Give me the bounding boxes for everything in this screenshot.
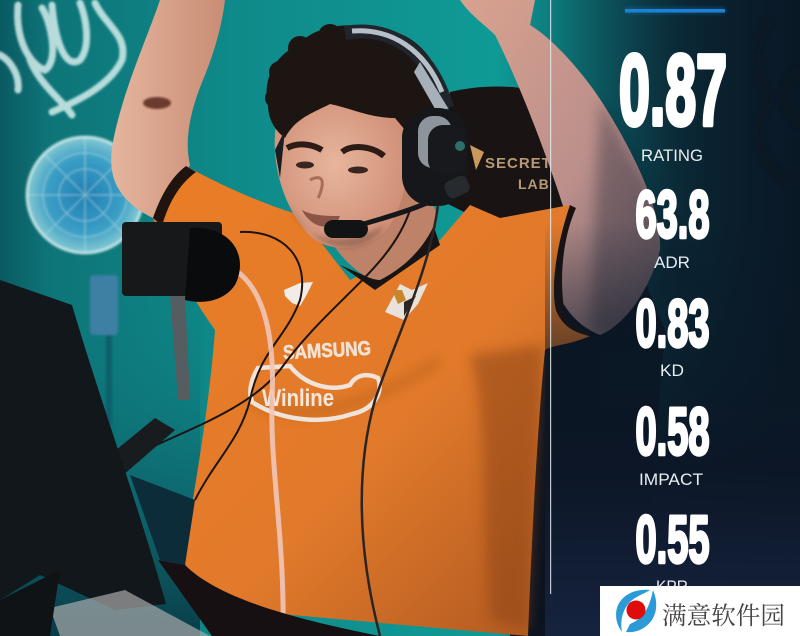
- thin black cables: [100, 210, 410, 500]
- desk: [0, 560, 380, 636]
- blue bottom-left shelf: [130, 475, 195, 565]
- stat: ADR label: ADR: [654, 253, 690, 272]
- white camera cable: [235, 270, 283, 636]
- face: [275, 96, 408, 248]
- faint logo in right panel: [757, 20, 800, 180]
- microphone boom: [324, 174, 472, 238]
- monitor stand: [0, 295, 190, 565]
- stat: KPR label: KPR: [656, 577, 688, 596]
- stat: rating label: RATING: [641, 146, 703, 165]
- left monitor: [0, 280, 166, 610]
- gaming chair: [440, 86, 566, 230]
- lower right dark gradient: [545, 220, 800, 636]
- jersey brand mark: [284, 282, 313, 306]
- facial features: [287, 144, 385, 248]
- stat: ADR value: 63.8: [636, 178, 710, 252]
- graffiti wall art: [0, 3, 123, 115]
- curly hair: [265, 24, 440, 138]
- raised arm: viewer right: [460, 0, 660, 335]
- shaded forearm overlay: [590, 100, 700, 340]
- headset cable: [362, 205, 438, 636]
- stat: KPR value: 0.55: [636, 502, 710, 578]
- gaming chair: LAB: [518, 176, 550, 192]
- watermark logo icon: [616, 590, 656, 632]
- stat: impact value: 0.58: [636, 394, 710, 470]
- neck: [318, 180, 438, 280]
- right panel side gradient: [550, 0, 800, 636]
- stat: KD value: 0.83: [636, 286, 710, 362]
- vertical divider line: [550, 0, 551, 594]
- stat: KD label: KD: [660, 361, 684, 380]
- dark lower chair: [510, 270, 665, 636]
- birthmark on arm: [143, 97, 171, 109]
- camera on arm: [122, 222, 240, 302]
- watermark text: 满意软件园: [662, 602, 785, 630]
- headset: [275, 31, 468, 206]
- jersey sponsor logo: [250, 366, 380, 420]
- stat: impact label: IMPACT: [639, 470, 703, 489]
- jersey sponsor logo: Winline: [262, 385, 334, 412]
- watermark panel: [600, 586, 800, 636]
- jersey team badge: [385, 283, 428, 320]
- gaming chair: SECRET: [485, 155, 552, 172]
- jersey sponsor SAMSUNG: SAMSUNG: [283, 338, 372, 364]
- raised arm: viewer left: [111, 0, 225, 220]
- electric fan: [27, 137, 143, 425]
- blue accent bar: [625, 8, 725, 13]
- jersey: [153, 166, 590, 636]
